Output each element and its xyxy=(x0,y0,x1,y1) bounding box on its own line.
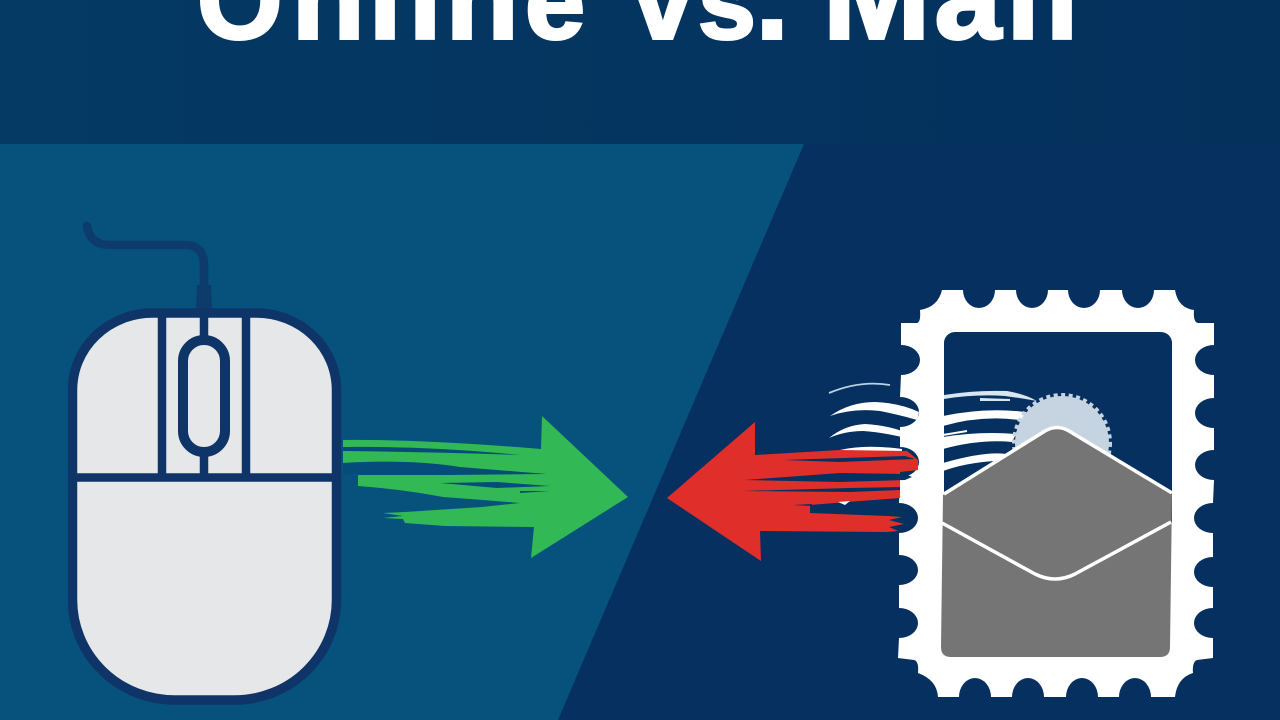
postmark waves xyxy=(829,384,1037,471)
mouse scroll wheel xyxy=(183,340,225,452)
stamp window xyxy=(944,332,1172,532)
panel: online background xyxy=(0,144,804,720)
arrow: green pointing right xyxy=(343,416,628,558)
arrow: red pointing left xyxy=(667,422,918,561)
mouse body xyxy=(72,313,337,700)
green arrow shape xyxy=(343,416,628,558)
envelope xyxy=(941,428,1172,657)
stamp perforated frame xyxy=(898,290,1214,697)
icon: computer mouse xyxy=(72,226,337,700)
mouse button dividers xyxy=(72,313,336,478)
red arrow shape xyxy=(667,422,918,561)
header band xyxy=(0,0,1280,144)
green arrow brush streaks xyxy=(343,447,550,493)
red arrow brush streaks xyxy=(742,456,915,506)
sun gear xyxy=(1014,395,1110,491)
icon: postage stamp xyxy=(829,290,1214,697)
mouse cord xyxy=(87,226,212,312)
red arrow white fleck xyxy=(838,501,850,505)
